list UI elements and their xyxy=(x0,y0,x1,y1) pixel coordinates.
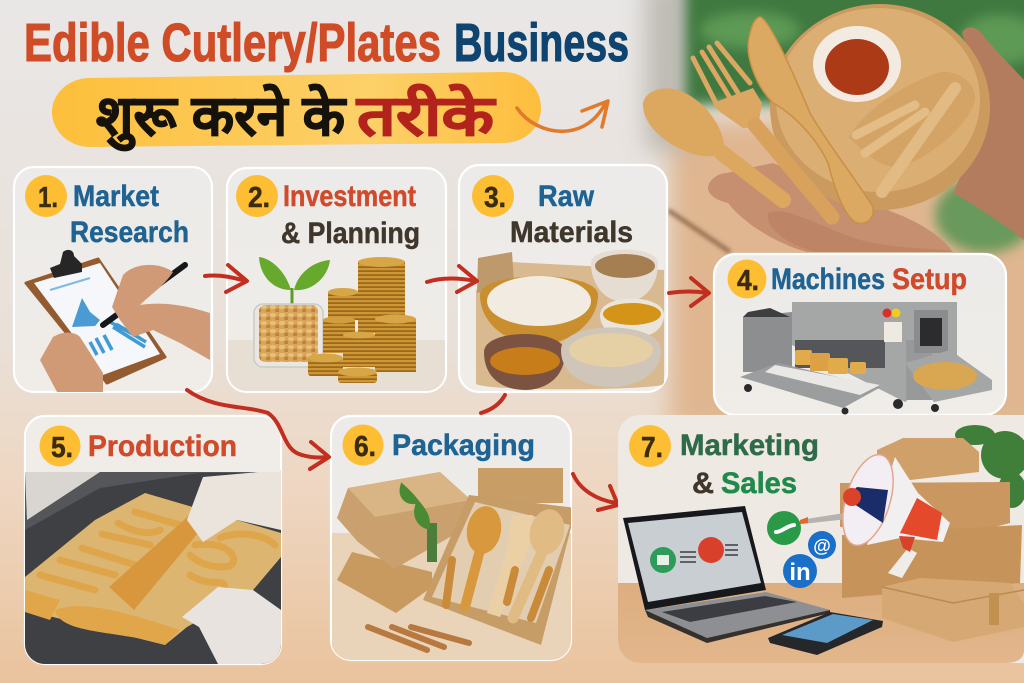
step badge 2 xyxy=(236,175,278,217)
heading: Market Research xyxy=(70,180,189,249)
title: Business: Business xyxy=(454,13,629,73)
heading: Market Research: Research xyxy=(70,216,189,249)
step badge 7 xyxy=(629,425,671,467)
panel 7: Marketing & Sales xyxy=(618,415,1024,663)
phone screen xyxy=(782,614,873,643)
heading: Marketing & Sales: Marketing xyxy=(680,429,819,462)
laptop xyxy=(623,506,830,643)
arrow: step 1 to 2 xyxy=(205,265,247,292)
clipboard and hands illustration xyxy=(26,250,210,392)
heading: Production: Production xyxy=(88,430,237,463)
panel 3: Raw Materials xyxy=(459,165,667,392)
arrow: step 2 to 3 xyxy=(427,266,477,292)
panel 6: Packaging xyxy=(331,416,576,660)
heading: Marketing & Sales xyxy=(680,429,819,500)
step badge 4 xyxy=(728,260,766,298)
step badge 3: 3. xyxy=(484,182,506,214)
step badge 1 xyxy=(25,175,67,217)
arrow: step 6 to 7 xyxy=(573,474,618,510)
title: Edible Cutlery/Plates: Edible Cutlery/Plates xyxy=(24,13,441,73)
wooden table xyxy=(618,583,1024,663)
bowls of grains and flour xyxy=(476,250,664,390)
step badge 7: 7. xyxy=(641,432,663,464)
panel 1: Market Research xyxy=(14,167,212,392)
kraft boxes with edible cutlery xyxy=(332,468,576,660)
heading: Packaging: Packaging xyxy=(392,429,535,462)
step badge 1: 1. xyxy=(38,182,58,214)
social icons: in xyxy=(789,559,811,586)
heading: Raw Materials: Raw xyxy=(538,180,595,213)
step badge 2: 2. xyxy=(248,182,270,214)
heading: Market Research: Market xyxy=(73,180,159,213)
subtitle pill: Hindi heading: तरीके xyxy=(356,83,496,147)
smartphone xyxy=(768,612,883,655)
step badge 4: 4. xyxy=(737,265,759,297)
arrow: title to hero photo xyxy=(517,101,608,131)
heading: Marketing & Sales: Sales xyxy=(721,467,797,500)
heading: Investment & Planning: & Planning xyxy=(281,217,420,250)
heading: Raw Materials: Materials xyxy=(510,216,633,249)
heading: Machines Setup: Setup xyxy=(892,263,967,296)
baking tray photo with dough and gloved hands xyxy=(25,470,281,664)
cardboard boxes xyxy=(840,438,1024,642)
social icons xyxy=(767,511,836,588)
step badge 6 xyxy=(342,424,384,466)
hero photo: hands holding edible plate and cutlery xyxy=(643,4,1024,252)
table surface xyxy=(228,340,445,391)
subtitle pill: Hindi heading: शुरू करने के xyxy=(96,83,347,151)
panel 2: Investment & Planning xyxy=(227,168,446,392)
seedling in glass jar of seeds xyxy=(254,257,330,367)
heading: Machines Setup: Machines xyxy=(771,263,885,296)
subtitle pill: Hindi heading xyxy=(52,72,541,151)
heading: Marketing & Sales: & xyxy=(692,467,714,500)
forming machine illustration xyxy=(740,302,992,414)
plant xyxy=(955,425,1024,508)
panel 4: Machines Setup xyxy=(714,254,1006,415)
header band xyxy=(26,417,280,472)
step badge 6: 6. xyxy=(354,431,376,463)
heading: Investment & Planning xyxy=(281,180,420,250)
gold coin stacks xyxy=(308,257,416,383)
heading: Investment & Planning: Investment xyxy=(283,180,416,213)
heading: Machines Setup xyxy=(771,263,967,296)
social icons: @ xyxy=(813,536,831,556)
megaphone xyxy=(800,449,950,578)
step badge 5: 5. xyxy=(51,432,73,464)
panel 5: Production xyxy=(25,416,281,664)
arrow: step 3 down toward step 6 xyxy=(481,395,505,413)
arrow: step 1 to 6 xyxy=(187,390,329,469)
step badge 3 xyxy=(472,175,514,217)
step badge 5 xyxy=(40,426,80,466)
heading: Raw Materials xyxy=(510,180,633,249)
arrow: step 3 to 4 xyxy=(669,278,709,306)
